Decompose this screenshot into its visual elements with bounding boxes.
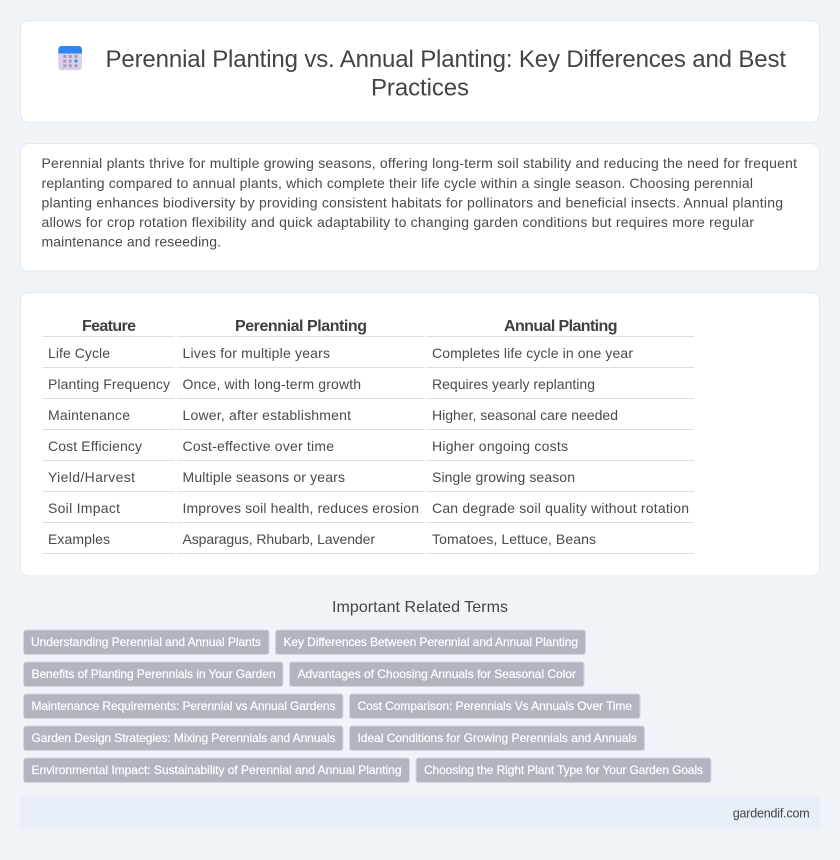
- tag: [24, 694, 343, 718]
- tag: [24, 758, 410, 782]
- row: planting frequency: Requires yearly replanting: [432, 376, 595, 392]
- row: planting frequency: Once, with long-term growth: [182, 376, 361, 392]
- row: soil impact: Improves soil health, reduces erosion: [182, 500, 419, 516]
- tag: [276, 630, 586, 654]
- row: life cycle: Lives for multiple years: [182, 345, 330, 361]
- row: maintenance: Maintenance: [48, 407, 130, 423]
- row: maintenance: Lower, after establishment: [182, 407, 351, 423]
- row: soil impact: [43, 500, 694, 522]
- intro paragraph: planting enhances biodiversity by providing consistent habitats for pollinators and beneficial insects. Annual planting: [42, 194, 783, 210]
- tag: Garden Design Strategies: Mixing Perennials and Annuals: [32, 731, 336, 745]
- related term tags: [24, 630, 711, 782]
- row: cost efficiency: Cost-effective over time: [182, 438, 334, 454]
- panel: introduction: [20, 144, 820, 271]
- title: Perennial Planting vs. Annual Planting: Key Differences and Best: [106, 46, 786, 73]
- row: cost efficiency: Higher ongoing costs: [432, 438, 568, 454]
- row: maintenance: [43, 407, 694, 430]
- row: life cycle: Life Cycle: [48, 345, 110, 361]
- tag: [416, 758, 711, 782]
- tag: Maintenance Requirements: Perennial vs Annual Gardens: [32, 699, 336, 713]
- table header row: Feature: [82, 318, 136, 335]
- table header row: Annual Planting: [504, 318, 618, 335]
- intro paragraph: allows for crop rotation flexibility and quick adaptability to changing garden conditions but requires more regular: [42, 214, 754, 230]
- row: cost efficiency: [43, 438, 694, 460]
- footer: [20, 796, 820, 830]
- row: soil impact: Can degrade soil quality without rotation: [432, 500, 689, 516]
- tag: [290, 662, 584, 686]
- tag: [24, 662, 283, 686]
- row: examples: Examples: [48, 531, 110, 547]
- row: examples: Tomatoes, Lettuce, Beans: [432, 531, 596, 547]
- tag: [350, 694, 640, 718]
- icon: calendar: [58, 46, 82, 70]
- row: cost efficiency: Cost Efficiency: [48, 438, 142, 454]
- row: maintenance: Higher, seasonal care needed: [432, 407, 618, 423]
- table header row: Perennial Planting: [235, 318, 367, 335]
- row: examples: Asparagus, Rhubarb, Lavender: [182, 531, 375, 547]
- panel: title header: [20, 20, 820, 122]
- intro paragraph: replanting compared to annual plants, which complete their life cycle within a single season. Choosing perennial: [42, 175, 753, 191]
- row: soil impact: Soil Impact: [48, 500, 120, 516]
- row: yield and harvest: [43, 469, 694, 492]
- row: planting frequency: [43, 376, 694, 398]
- tag: Key Differences Between Perennial and Annual Planting: [284, 635, 578, 649]
- table header row: [43, 318, 694, 336]
- row: planting frequency: Planting Frequency: [48, 376, 170, 392]
- tag: Understanding Perennial and Annual Plants: [31, 635, 261, 649]
- intro paragraph: maintenance and reseeding.: [42, 234, 221, 250]
- row: examples: [43, 531, 694, 554]
- tag: [24, 726, 343, 750]
- tag: Benefits of Planting Perennials in Your Garden: [32, 667, 276, 681]
- title: Practices: [371, 74, 469, 102]
- row: yield and harvest: Multiple seasons or years: [182, 469, 345, 485]
- row: life cycle: [43, 345, 694, 368]
- row: yield and harvest: Yield/Harvest: [48, 469, 135, 485]
- footer: gardendif.com: [733, 806, 810, 820]
- title: [106, 46, 786, 102]
- tag: Environmental Impact: Sustainability of Perennial and Annual Planting: [32, 763, 402, 777]
- tag: [350, 726, 644, 750]
- heading: related terms: Important Related Terms: [332, 599, 508, 616]
- tag: [24, 630, 269, 654]
- panel: comparison table: [20, 292, 820, 576]
- row: life cycle: Completes life cycle in one year: [432, 345, 633, 361]
- tag: Choosing the Right Plant Type for Your Garden Goals: [424, 763, 703, 777]
- intro paragraph: Perennial plants thrive for multiple growing seasons, offering long-term soil stability and reducing the need for frequent: [42, 155, 797, 171]
- intro paragraph: [42, 155, 797, 250]
- tag: Advantages of Choosing Annuals for Seasonal Color: [298, 667, 576, 681]
- tag: Ideal Conditions for Growing Perennials and Annuals: [358, 731, 637, 745]
- tag: Cost Comparison: Perennials Vs Annuals Over Time: [358, 699, 632, 713]
- row: yield and harvest: Single growing season: [432, 469, 575, 485]
